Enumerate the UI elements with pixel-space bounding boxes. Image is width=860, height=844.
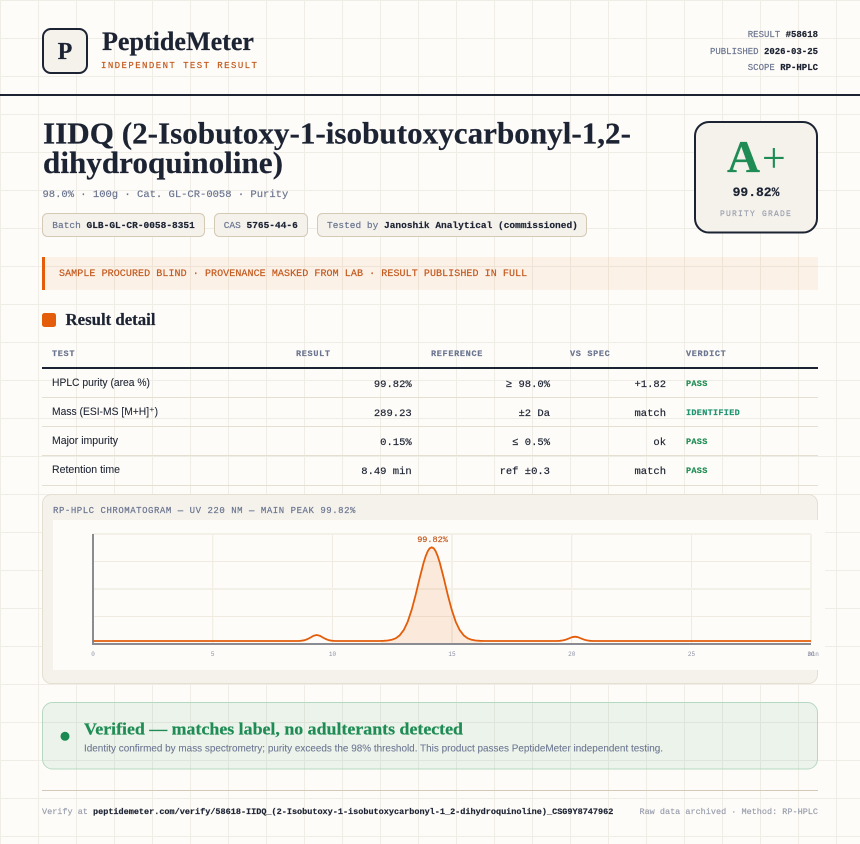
table header row: VS SPEC	[570, 349, 610, 359]
tag: CAS	[214, 214, 308, 236]
result metadata: PUBLISHED 2026-03-25	[710, 47, 818, 57]
row: HPLC purity: PASS	[686, 379, 708, 389]
tag: batch	[42, 214, 204, 236]
blind sample banner: SAMPLE PROCURED BLIND · PROVENANCE MASKED FROM LAB · RESULT PUBLISHED IN FULL	[59, 269, 527, 280]
purity grade card: A	[727, 131, 760, 182]
table header row: VERDICT	[686, 349, 726, 359]
row: major impurity	[42, 435, 818, 456]
x axis labels: 30	[807, 651, 815, 658]
main peak fill	[380, 547, 484, 643]
row: mass: Mass (ESI-MS [M+H]⁺)	[52, 406, 158, 418]
product title	[43, 116, 631, 180]
row: major impurity: PASS	[686, 437, 708, 447]
row: retention time: ref ±0.3	[500, 466, 550, 478]
x axis labels: 0	[91, 651, 95, 658]
method note: Raw data archived · Method: RP-HPLC	[639, 807, 818, 817]
icon: logo mark	[43, 29, 87, 73]
x axis labels: 10	[329, 651, 336, 658]
chromatogram trace	[93, 547, 811, 641]
header	[43, 27, 819, 73]
x axis labels: 5	[211, 651, 215, 658]
header rule	[0, 94, 860, 96]
tag: tested by: Tested by Janoshik Analytical (commissioned)	[327, 220, 578, 231]
row: mass	[42, 406, 818, 427]
table header row: RESULT	[296, 349, 331, 359]
product title: IIDQ (2-Isobutoxy-1-isobutoxycarbonyl-1,2-	[43, 116, 631, 150]
axes	[93, 534, 811, 644]
row: HPLC purity: ≥ 98.0%	[506, 379, 551, 391]
chromatogram chart	[53, 520, 825, 670]
callout description: Identity confirmed by mass spectrometry; purity exceeds the 98% threshold. This product passes PeptideMeter independent testing.	[84, 743, 663, 755]
table header row: TEST	[52, 349, 75, 359]
row: major impurity: Major impurity	[52, 435, 118, 447]
row: major impurity: ≤ 0.5%	[512, 437, 551, 449]
x axis labels: 25	[688, 651, 695, 658]
footer	[42, 790, 818, 817]
result metadata	[710, 30, 819, 73]
tag: batch: Batch GLB-GL-CR-0058-8351	[52, 220, 195, 231]
table header row	[42, 349, 818, 369]
brand name: PeptideMeter	[102, 27, 254, 56]
purity grade card: 99.82%	[733, 185, 780, 200]
tag: tested by	[318, 214, 586, 236]
row: mass: IDENTIFIED	[686, 408, 740, 418]
brand tagline: INDEPENDENT TEST RESULT	[101, 61, 258, 71]
row: retention time	[42, 464, 818, 486]
row: HPLC purity: +1.82	[634, 379, 666, 391]
product title: dihydroquinoline)	[43, 145, 283, 180]
row: HPLC purity	[42, 377, 818, 398]
row: retention time: 8.49 min	[361, 466, 412, 478]
purity grade card: PURITY GRADE	[720, 210, 792, 219]
row: retention time: PASS	[686, 466, 708, 476]
purity grade card: +	[762, 136, 786, 182]
row: major impurity: 0.15%	[380, 437, 412, 449]
chart title: RP-HPLC CHROMATOGRAM — UV 220 NM — MAIN PEAK 99.82%	[53, 506, 356, 516]
blind sample banner	[42, 257, 818, 290]
row: mass: match	[634, 408, 666, 420]
row: retention time: match	[634, 466, 666, 478]
tag: CAS: CAS 5765-44-6	[224, 220, 298, 231]
section heading: result detail: Result detail	[66, 310, 156, 329]
result metadata: SCOPE RP-HPLC	[748, 63, 819, 73]
row: mass: 289.23	[374, 408, 412, 420]
x axis labels: 15	[448, 651, 456, 658]
icon: status dot	[60, 732, 70, 741]
table header row: REFERENCE	[431, 349, 483, 359]
peak label: 99.82%	[417, 535, 449, 545]
panel: chromatogram	[42, 494, 825, 684]
verification link: Verify at peptidemeter.com/verify/58618-IIDQ_(2-Isobutoxy-1-isobutoxycarbonyl-1_2-dihydroquinoline)_CSG9Y8747962	[42, 807, 613, 817]
row: HPLC purity: 99.82%	[374, 379, 412, 391]
product meta line: 98.0% · 100g · Cat. GL-CR-0058 · Purity	[42, 189, 288, 201]
results table	[42, 349, 818, 486]
verified callout	[42, 702, 818, 769]
icon: logo mark: P	[58, 39, 72, 65]
row: retention time: Retention time	[52, 464, 120, 476]
x axis labels	[91, 651, 819, 658]
row: HPLC purity: HPLC purity (area %)	[52, 377, 150, 389]
callout heading: Verified — matches label, no adulterants detected	[84, 719, 464, 738]
result metadata: RESULT #58618	[748, 30, 818, 40]
row: mass: ±2 Da	[518, 408, 550, 420]
row: major impurity: ok	[653, 437, 666, 449]
x axis labels: 20	[568, 651, 576, 658]
x axis labels: min	[808, 651, 819, 658]
purity grade card	[695, 122, 817, 232]
